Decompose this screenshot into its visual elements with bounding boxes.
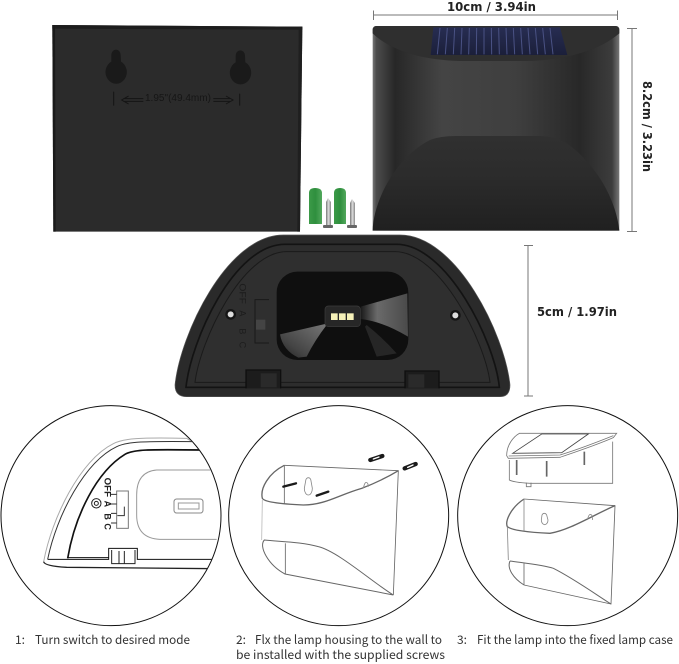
wall anchors: [370, 456, 416, 468]
LED chip outline: [174, 499, 203, 513]
LED chip: [325, 306, 360, 327]
icon: wall anchor: [309, 188, 322, 224]
right clip: [405, 371, 439, 388]
mode switch: C: [238, 342, 248, 349]
icon: left keyhole: [105, 50, 127, 84]
step 3 panel: fitting illustration: [458, 406, 678, 626]
hole spacing text: 1.95"(49.4mm): [145, 93, 211, 104]
icon: right keyhole: [230, 50, 251, 84]
step 1 panel: switch illustration: [1, 406, 221, 626]
switch labels: [102, 478, 112, 530]
icon: screw: [350, 199, 355, 225]
lamp top cap: [373, 26, 619, 61]
lamp outer shell: [175, 235, 510, 397]
left screw: [225, 309, 236, 320]
dimension: height: [627, 28, 654, 232]
lamp edge outlines: [44, 438, 217, 569]
lamp housing outline: [262, 465, 398, 595]
lens recess: [277, 272, 408, 360]
switch labels: A: [102, 501, 112, 508]
solar panel: [431, 27, 567, 55]
lamp lower shade: [373, 136, 619, 231]
hole spacing arrows: [114, 92, 240, 106]
dimension: height: 8.2cm / 3.23in: [640, 81, 654, 172]
top view lamp body: [373, 26, 619, 231]
mode switch: [238, 283, 269, 349]
lamp case: [507, 499, 615, 604]
mode switch: OFF: [238, 283, 248, 305]
screws: [283, 483, 328, 496]
lamp cap: [507, 433, 617, 487]
mode switch: B: [238, 328, 248, 334]
step 2 caption: 2:: [236, 631, 246, 648]
step 3 caption: 3:: [457, 631, 467, 648]
step 2 caption: [236, 631, 445, 663]
switch labels: OFF: [102, 478, 112, 498]
dimension: width: [373, 0, 618, 20]
left clip: [246, 370, 281, 388]
switch labels: B: [102, 513, 112, 520]
mode switch: A: [238, 310, 248, 316]
icon: screw: [326, 198, 331, 225]
back plate with keyholes: [52, 25, 302, 232]
dimension: lamp height: 5cm / 1.97in: [537, 305, 617, 319]
step 2 caption: be installed with the supplied screws: [236, 646, 445, 663]
step 2 caption: Flx the lamp housing to the wall to: [255, 631, 442, 648]
switch outline: [111, 491, 128, 528]
dimension: lamp height: [524, 245, 617, 396]
dimension: width: 10cm / 3.94in: [447, 0, 536, 14]
lamp inner plate: [186, 244, 499, 387]
lamp underside: [175, 235, 510, 397]
step 3 caption: Fit the lamp into the fixed lamp case: [477, 631, 673, 648]
step 2 panel: housing illustration: [229, 406, 449, 626]
switch labels: C: [102, 523, 112, 530]
right screw: [450, 310, 461, 321]
step 1 caption: Turn switch to desired mode: [35, 631, 190, 648]
screw symbol: [92, 499, 101, 508]
wall anchors and screws: [309, 188, 357, 228]
step 1 caption: 1:: [15, 631, 25, 648]
lens window outline: [137, 470, 217, 539]
icon: wall anchor: [334, 188, 346, 224]
